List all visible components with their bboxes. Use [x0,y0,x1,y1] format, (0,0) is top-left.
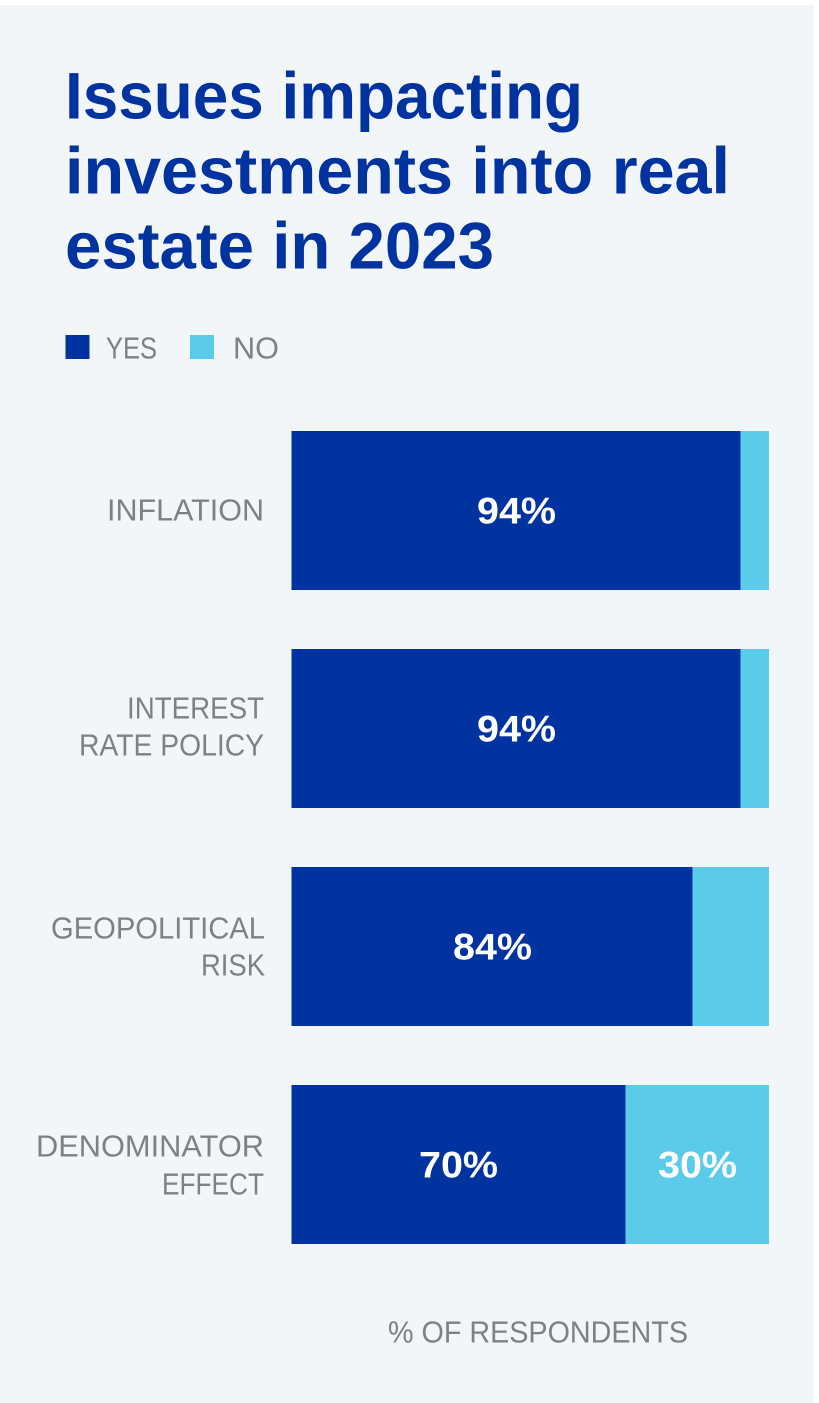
row: denominator effect [36,1085,769,1244]
row: denominator effect: EFFECT [162,1166,264,1202]
row: interest rate policy: INTEREST [127,690,264,726]
legend: NO [233,330,279,366]
row: denominator effect: DENOMINATOR [36,1128,264,1164]
row: geopolitical risk: 84% [453,926,532,968]
row: interest rate policy: RATE POLICY [79,728,264,762]
legend: YES [106,330,157,366]
row: inflation [107,431,769,590]
row: geopolitical risk: RISK [201,948,265,982]
row: denominator effect: 30% [658,1144,737,1186]
row: denominator effect: 70% [419,1144,498,1186]
axis label: % OF RESPONDENTS [388,1314,688,1350]
title: Issues impacting [65,58,583,132]
row: geopolitical risk [51,867,769,1026]
row: inflation: 94% [477,490,556,532]
title: estate in 2023 [65,208,494,282]
row: interest rate policy: 94% [477,708,556,750]
row: interest rate policy [79,649,769,808]
legend [66,330,279,366]
title: investments into real [65,134,730,208]
row: geopolitical risk: GEOPOLITICAL [51,910,265,946]
title [65,58,730,282]
row: inflation: INFLATION [107,492,264,528]
